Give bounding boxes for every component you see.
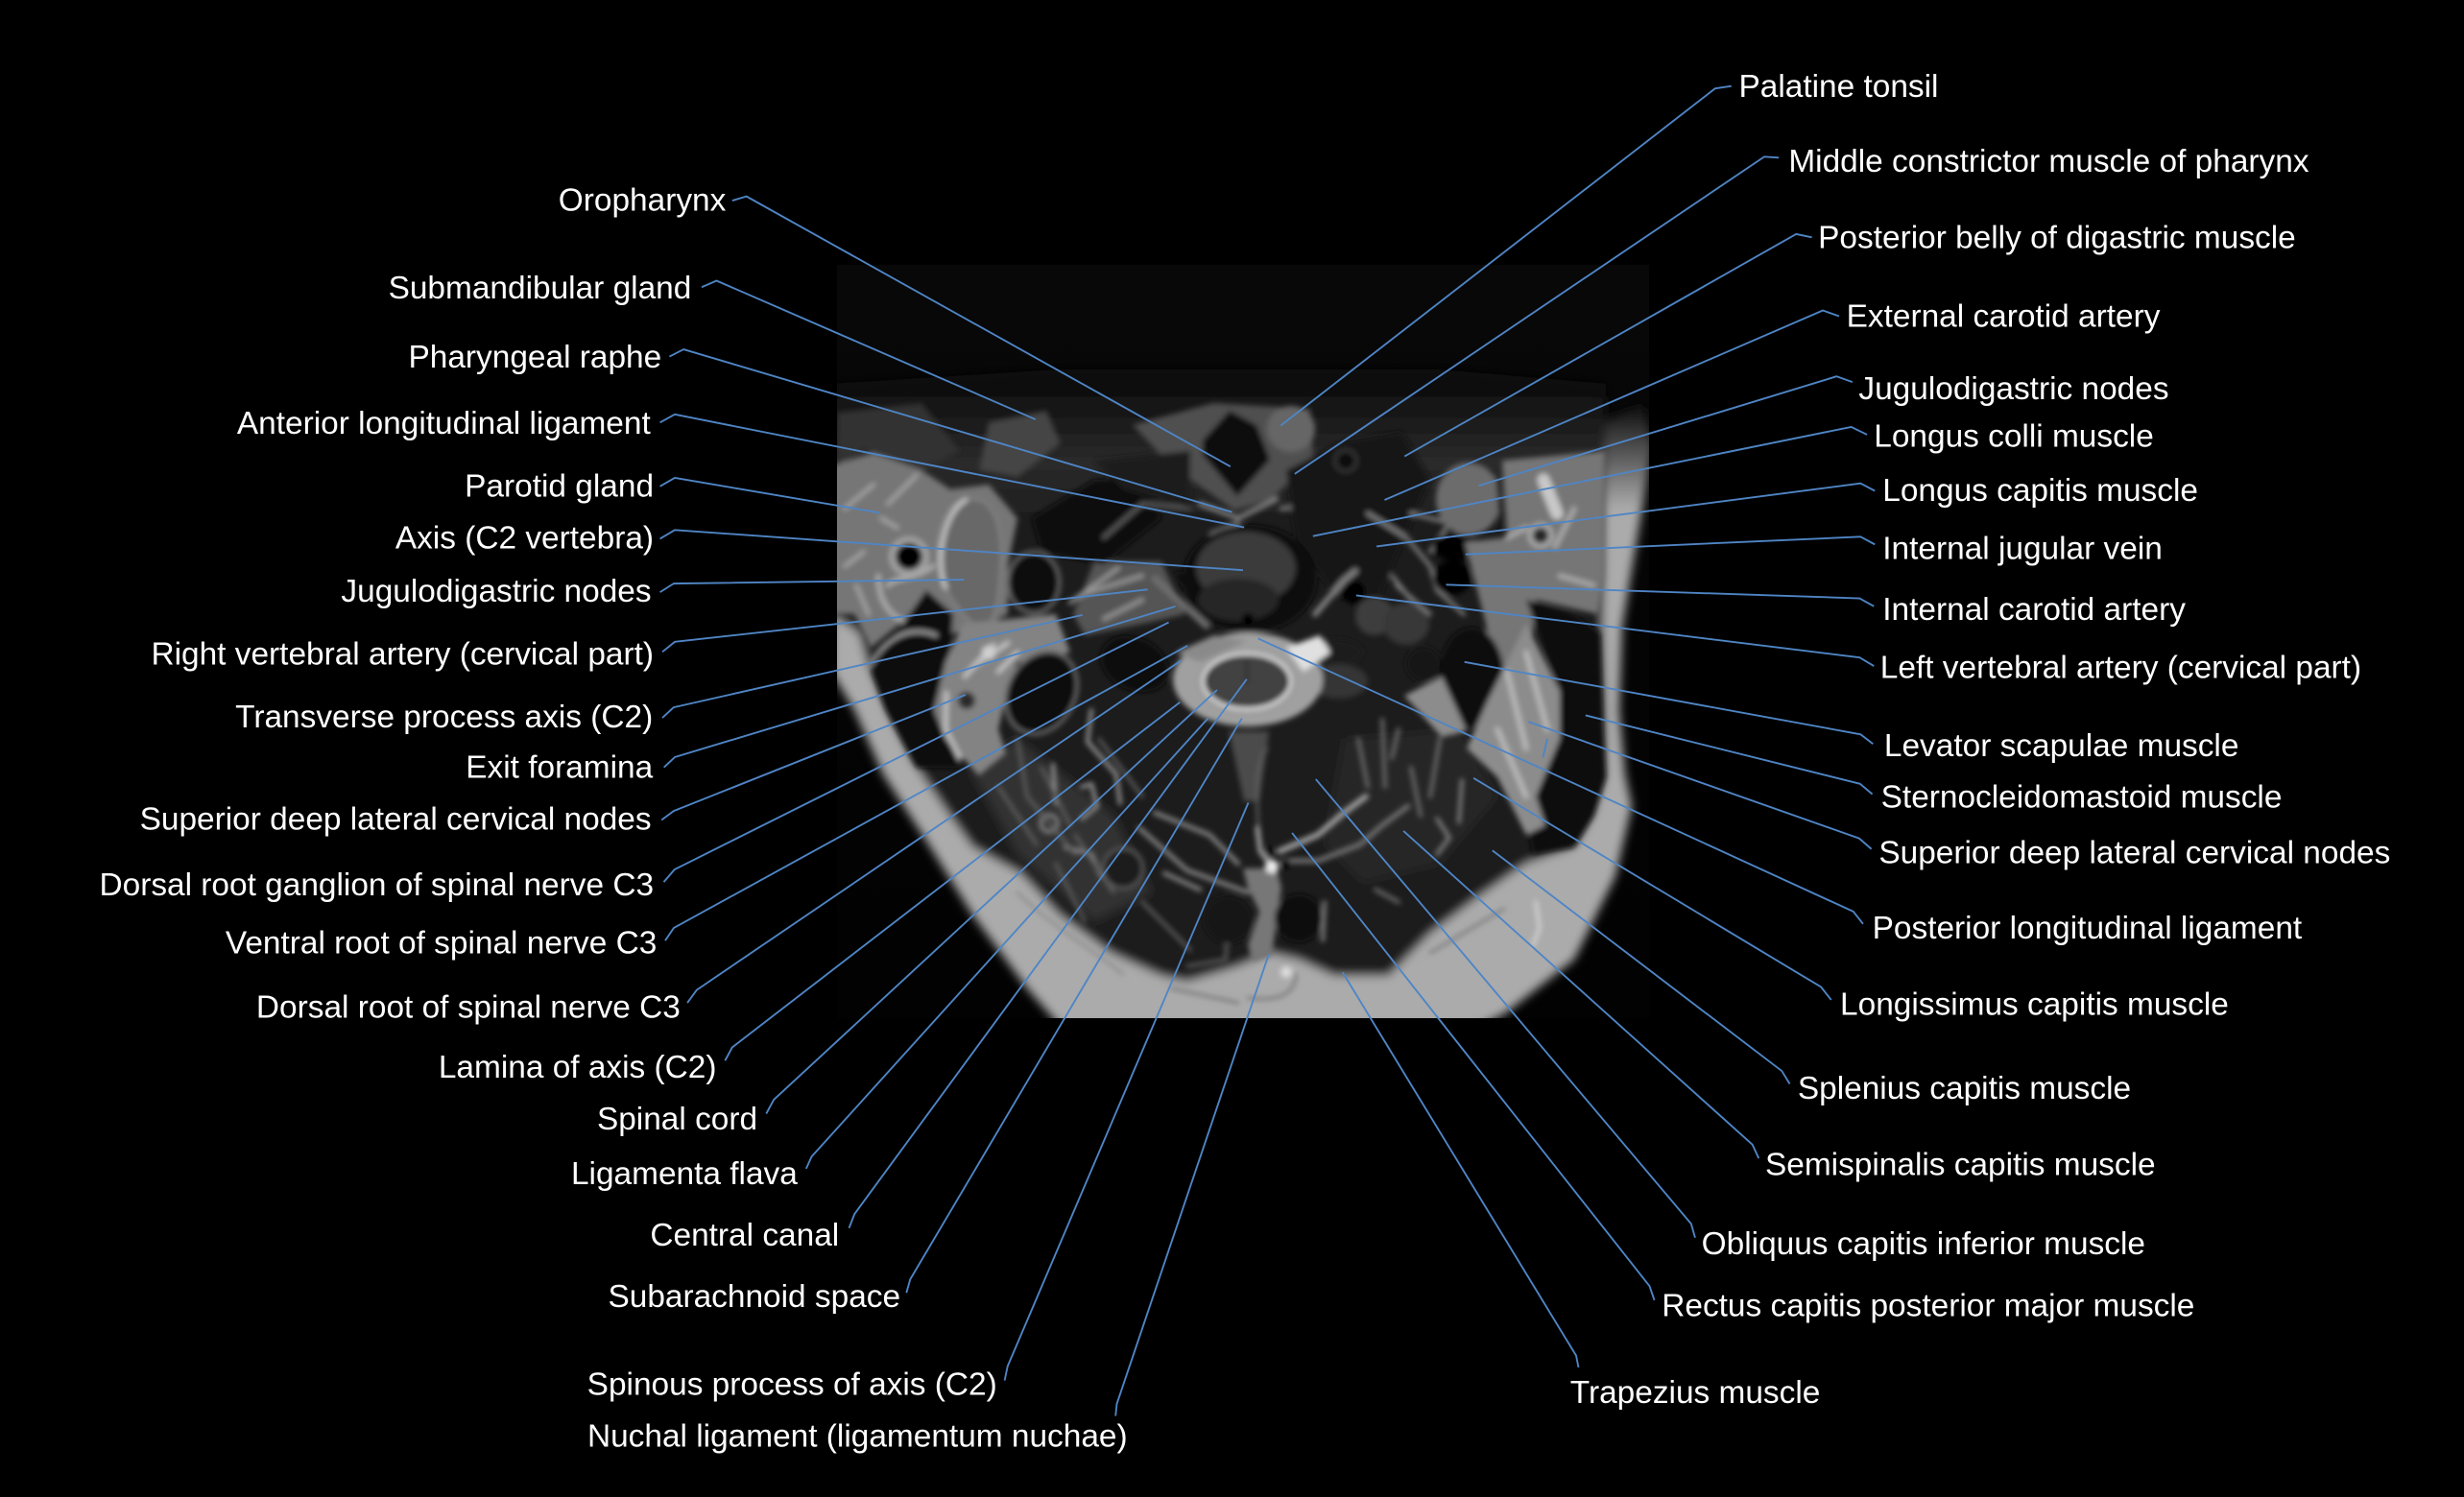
label: Superior deep lateral cervical nodes left: Superior deep lateral cervical nodes bbox=[140, 801, 652, 837]
label: Transverse process axis: Transverse process axis (C2) bbox=[235, 700, 653, 735]
label: Obliquus capitis inferior: Obliquus capitis inferior muscle bbox=[1702, 1226, 2145, 1262]
pharynx wall bbox=[1133, 403, 1313, 511]
MRI axial slice bbox=[837, 369, 1649, 1018]
pointer: Semispinalis capitis bbox=[1403, 831, 1758, 1158]
label: Internal carotid: Internal carotid artery bbox=[1882, 592, 2186, 628]
label: Jugulodigastric nodes right: Jugulodigastric nodes bbox=[1858, 371, 2169, 407]
spinal canal fat ring bbox=[1173, 632, 1323, 726]
label: Splenius capitis: Splenius capitis muscle bbox=[1798, 1071, 2131, 1106]
label: Spinal cord: Spinal cord bbox=[597, 1102, 757, 1137]
pointer: Jugulodigastric nodes left bbox=[660, 580, 964, 592]
pointer: Obliquus capitis inferior bbox=[1316, 779, 1695, 1238]
prevertebral soft tissues bbox=[1200, 499, 1277, 518]
label: Dorsal root ganglion: Dorsal root ganglion of spinal nerve C3 bbox=[99, 867, 654, 903]
fat band details bbox=[1430, 909, 1504, 953]
left large oval bbox=[945, 503, 998, 622]
label: Jugulodigastric nodes left: Jugulodigastric nodes bbox=[341, 574, 652, 609]
pointer: Oropharynx bbox=[732, 197, 1231, 466]
pointer: Anterior longitudinal ligament bbox=[660, 415, 1244, 528]
pointer: Splenius capitis bbox=[1493, 850, 1790, 1083]
left vessel ring bbox=[889, 536, 929, 577]
pointer: Longus colli bbox=[1313, 427, 1867, 536]
label: Parotid gland: Parotid gland bbox=[465, 468, 654, 504]
vertebral body of axis bbox=[1183, 525, 1317, 632]
right levator bbox=[1439, 628, 1504, 727]
pointer: Posterior belly of digastric bbox=[1404, 234, 1812, 457]
pointer: Middle constrictor bbox=[1295, 156, 1779, 474]
pointer: Internal jugular vein bbox=[1466, 536, 1875, 555]
right posterior fascial planes bbox=[1358, 720, 1440, 902]
right sternomastoid upper bbox=[1436, 463, 1501, 535]
pointer: Lamina of axis bbox=[725, 702, 1180, 1060]
pointer: Posterior longitudinal ligament bbox=[1258, 638, 1863, 924]
pointer: Longus capitis bbox=[1376, 484, 1875, 546]
pointer: Ventral root bbox=[665, 646, 1187, 940]
pointer: Central canal bbox=[849, 679, 1247, 1228]
label: Middle constrictor: Middle constrictor muscle of pharynx bbox=[1788, 144, 2309, 179]
pointer: Palatine tonsil bbox=[1280, 86, 1732, 425]
label: Nuchal ligament: Nuchal ligament (ligamentum nuchae) bbox=[587, 1419, 1128, 1455]
label: Ventral root: Ventral root of spinal nerve C3 bbox=[226, 926, 657, 962]
spinal cord bbox=[1208, 657, 1286, 705]
oropharynx air bbox=[1203, 411, 1270, 496]
midline under canal bbox=[1229, 731, 1269, 801]
label: Trapezius: Trapezius muscle bbox=[1570, 1375, 1820, 1411]
pointer: Rectus capitis posterior major bbox=[1292, 833, 1655, 1300]
pointer: Dorsal root ganglion bbox=[664, 623, 1169, 882]
left posterior fascial planes bbox=[1053, 710, 1120, 819]
pointer: Longissimus capitis bbox=[1473, 778, 1831, 1000]
pointer: Parotid gland bbox=[660, 478, 879, 512]
pointer: Spinal cord bbox=[766, 690, 1217, 1114]
label: Left vertebral artery: Left vertebral artery (cervical part) bbox=[1880, 650, 2361, 685]
label: External carotid: External carotid artery bbox=[1847, 298, 2161, 334]
pointer: Axis (C2 vertebra) bbox=[660, 530, 1243, 570]
pointer: Submandibular gland bbox=[702, 281, 1036, 419]
label: Posterior belly of digastric: Posterior belly of digastric muscle bbox=[1818, 221, 2296, 256]
label: Longus colli: Longus colli muscle bbox=[1874, 419, 2154, 455]
label: Internal jugular vein: Internal jugular vein bbox=[1882, 532, 2163, 567]
label: Longus capitis: Longus capitis muscle bbox=[1882, 473, 2198, 509]
pointer: Nuchal ligament bbox=[1115, 954, 1269, 1416]
label: Palatine tonsil: Palatine tonsil bbox=[1738, 69, 1938, 105]
label: Anterior longitudinal ligament: Anterior longitudinal ligament bbox=[237, 406, 651, 441]
pointer: Dorsal root bbox=[687, 660, 1181, 1003]
nuchal midline fat bbox=[1243, 868, 1281, 962]
right deep nodes bbox=[1342, 581, 1365, 604]
pointer: Ligamenta flava bbox=[806, 719, 1208, 1169]
right sternocleidomastoid bbox=[1526, 600, 1606, 854]
submandibular gland bbox=[979, 411, 1061, 477]
textured lower-left muscle field bbox=[969, 739, 1152, 921]
label: Longissimus capitis: Longissimus capitis muscle bbox=[1840, 986, 2229, 1022]
label: Right vertebral artery: Right vertebral artery (cervical part) bbox=[151, 636, 654, 672]
label: Submandibular gland: Submandibular gland bbox=[389, 271, 691, 306]
body fat band bbox=[831, 403, 1653, 1027]
pointer: Superior deep lateral cervical nodes right bbox=[1528, 722, 1872, 849]
label: Exit foramina: Exit foramina bbox=[466, 749, 654, 785]
pointer: Transverse process axis bbox=[662, 615, 1083, 718]
label: Spinous process: Spinous process of axis (C2) bbox=[587, 1367, 997, 1403]
pointer: Right vertebral artery bbox=[662, 589, 1148, 652]
pointer: Levator scapulae bbox=[1465, 662, 1873, 744]
label: Ligamenta flava: Ligamenta flava bbox=[571, 1156, 798, 1192]
label: Oropharynx: Oropharynx bbox=[559, 182, 727, 218]
vertebral artery region bbox=[1073, 561, 1185, 635]
pointer: Pharyngeal raphe bbox=[669, 349, 1232, 512]
label: Dorsal root: Dorsal root of spinal nerve C3 bbox=[256, 990, 681, 1026]
label: Pharyngeal raphe: Pharyngeal raphe bbox=[408, 340, 661, 375]
label: Axis (C2 vertebra): Axis (C2 vertebra) bbox=[395, 520, 654, 556]
label: Lamina of axis: Lamina of axis (C2) bbox=[439, 1050, 717, 1085]
pointer: Jugulodigastric nodes right bbox=[1479, 376, 1853, 486]
lateral fatty zone bbox=[934, 614, 1070, 775]
dark ovals bbox=[1001, 649, 1083, 739]
label: Superior deep lateral cervical nodes right: Superior deep lateral cervical nodes bbox=[1878, 835, 2390, 870]
label: Posterior longitudinal ligament: Posterior longitudinal ligament bbox=[1873, 911, 2303, 946]
label: Levator scapulae: Levator scapulae muscle bbox=[1884, 728, 2238, 764]
label: Central canal: Central canal bbox=[650, 1218, 839, 1253]
pointer: Sternocleidomastoid bbox=[1586, 715, 1873, 795]
pointer: Left vertebral artery bbox=[1356, 595, 1874, 666]
pointer: Trapezius bbox=[1343, 972, 1578, 1367]
pointer: Subarachnoid space bbox=[906, 719, 1242, 1293]
pointer: Spinous process bbox=[1005, 802, 1249, 1381]
pointer: Superior deep lateral cervical nodes left bbox=[661, 695, 966, 820]
left parotid region bbox=[831, 453, 1017, 648]
pointer: External carotid bbox=[1384, 310, 1839, 500]
label: Sternocleidomastoid: Sternocleidomastoid muscle bbox=[1881, 779, 2282, 815]
label: Rectus capitis posterior major: Rectus capitis posterior major muscle bbox=[1662, 1289, 2194, 1324]
label: Semispinalis capitis: Semispinalis capitis muscle bbox=[1765, 1147, 2156, 1182]
label: Subarachnoid space: Subarachnoid space bbox=[608, 1279, 900, 1315]
pointer: Exit foramina bbox=[664, 606, 1176, 768]
pointer: Internal carotid bbox=[1446, 584, 1874, 606]
deep muscle compartment bbox=[831, 369, 1606, 982]
left lateral muscle bbox=[872, 590, 960, 768]
